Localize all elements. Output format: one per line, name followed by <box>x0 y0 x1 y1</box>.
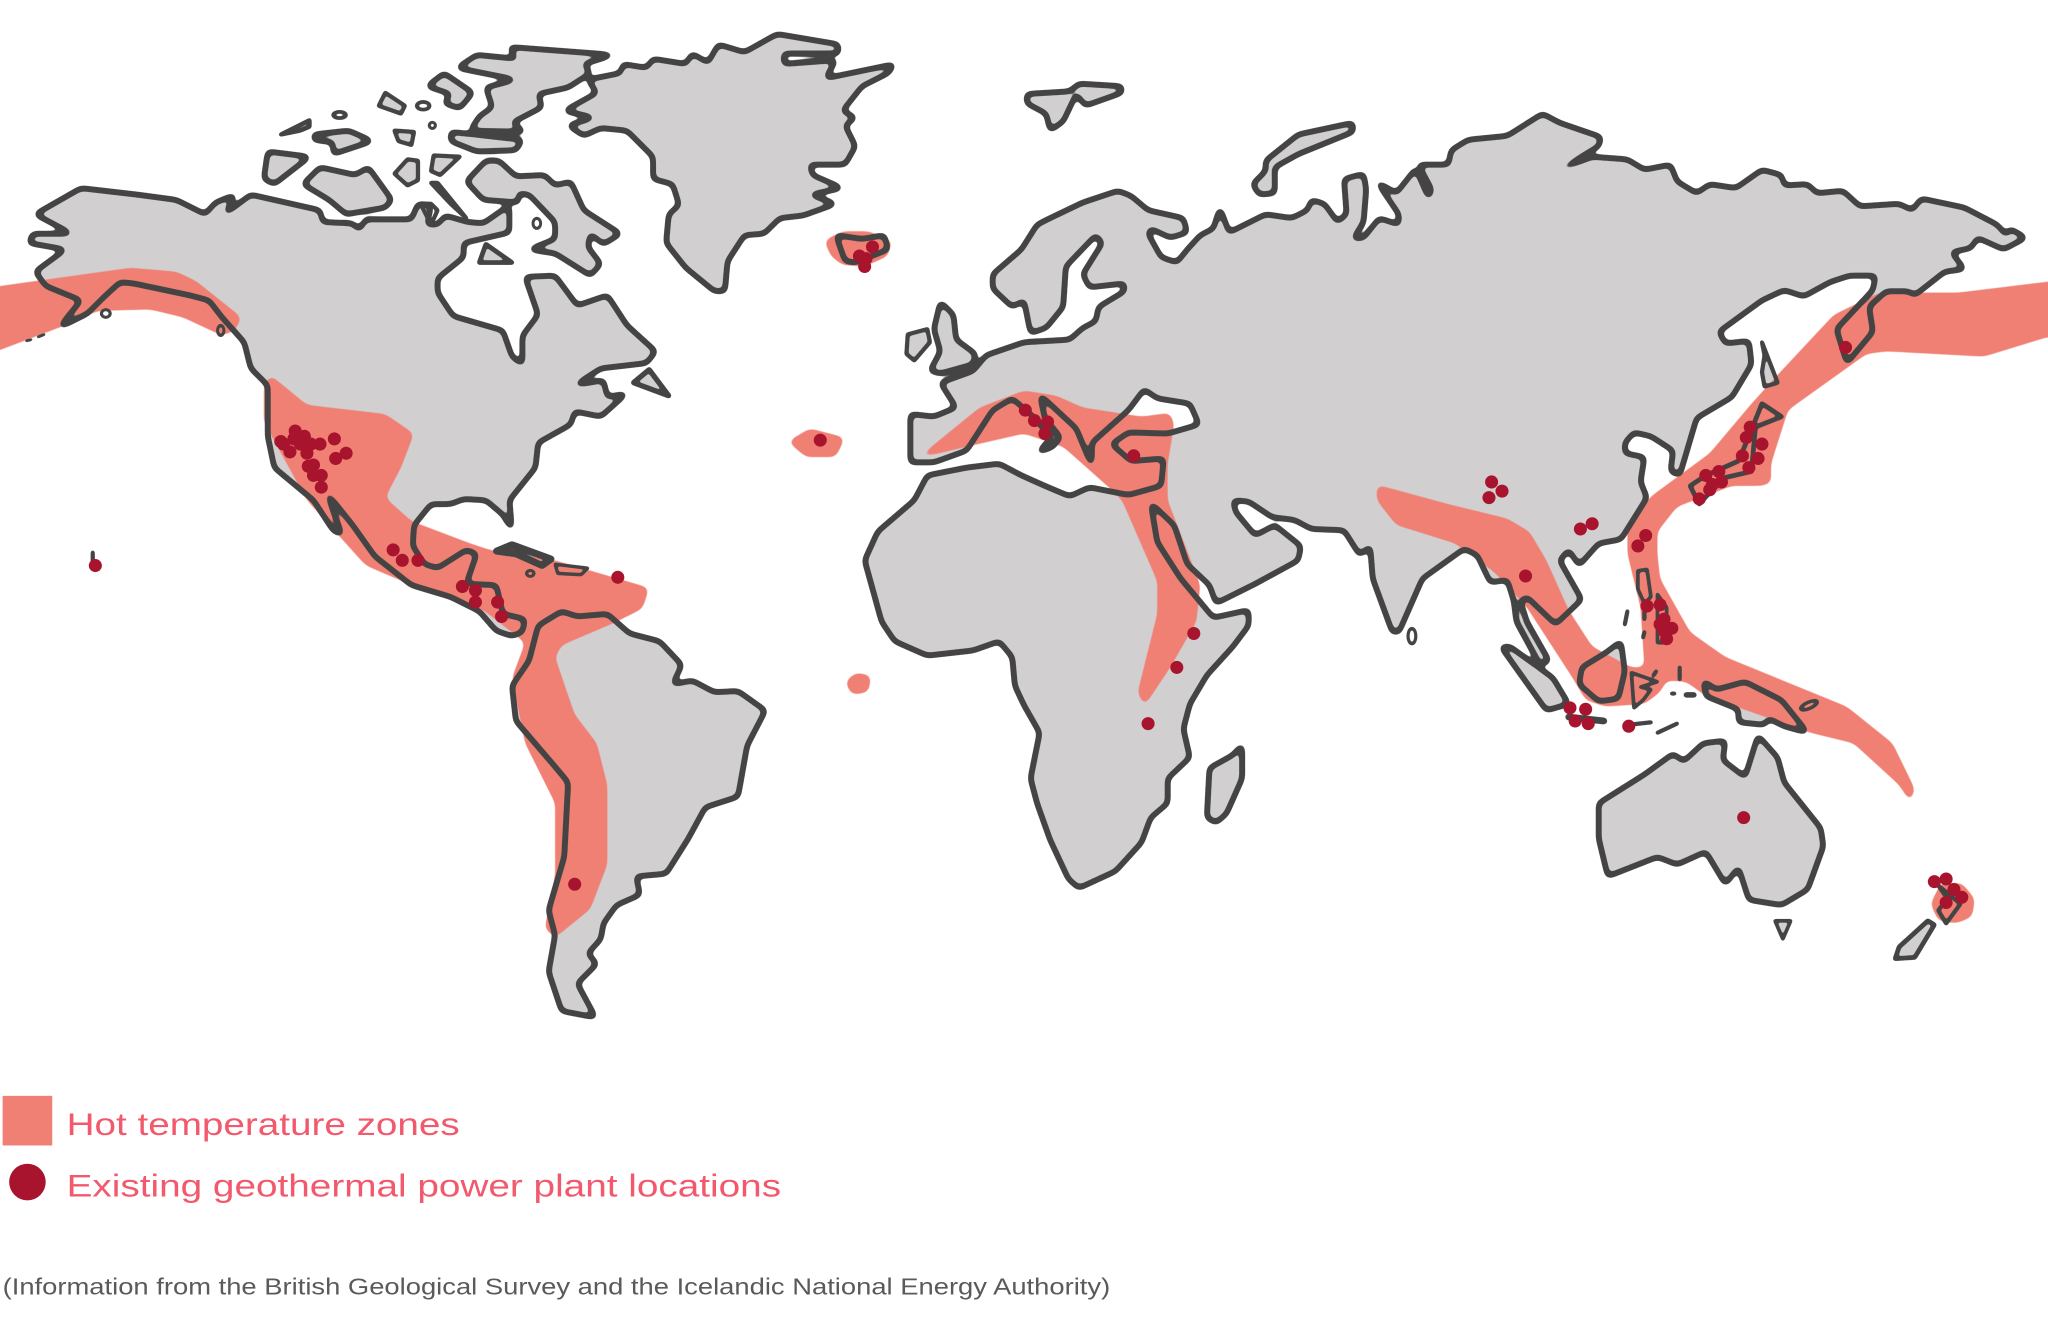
plant: Hawaii <box>89 559 102 572</box>
zone: Asia Pacific ring <box>1377 277 2048 803</box>
coastline contours: large land masses <box>29 34 2026 1017</box>
plants: Philippines <box>1640 598 1678 645</box>
plants: Iceland <box>853 240 879 273</box>
plants: Indonesia <box>1563 701 1635 733</box>
plant: Chile <box>568 878 581 891</box>
zone: Alaska arc <box>0 268 242 363</box>
zone: Iceland <box>824 231 892 266</box>
legend label: power plants: Existing geothermal power plant locations <box>67 1168 781 1203</box>
source note: (Information from the British Geological Survey and the Icelandic National Energy Authority) <box>3 1273 1110 1299</box>
land masses fill <box>29 34 2026 1017</box>
plants: New Zealand <box>1928 872 1968 909</box>
hot temperature zones <box>0 231 2048 938</box>
plants: Italy <box>1019 404 1054 440</box>
legend marker: power plants <box>9 1164 46 1200</box>
existing geothermal power plants <box>89 240 1968 909</box>
coastline outlines: small islands <box>26 93 1960 959</box>
zone: Mediterranean and East Africa <box>917 391 1200 707</box>
legend swatch: hot temperature zones <box>3 1096 52 1145</box>
plant: Australia <box>1737 811 1750 824</box>
zone: Azores <box>788 428 845 457</box>
plants: western North America <box>274 424 353 494</box>
plants: Asia <box>1482 341 1852 583</box>
plants: East Africa <box>1142 627 1200 730</box>
zone: South Atlantic island <box>845 673 871 695</box>
plant: Azores <box>814 434 827 447</box>
zone: Americas <box>264 375 649 938</box>
zone: New Zealand <box>1930 883 1975 923</box>
plants: Central America and Caribbean <box>387 543 624 623</box>
plants: Japan <box>1693 421 1768 505</box>
legend <box>3 1096 781 1203</box>
plant: Turkey <box>1127 449 1140 462</box>
legend label: hot temperature zones: Hot temperature zones <box>67 1107 460 1142</box>
